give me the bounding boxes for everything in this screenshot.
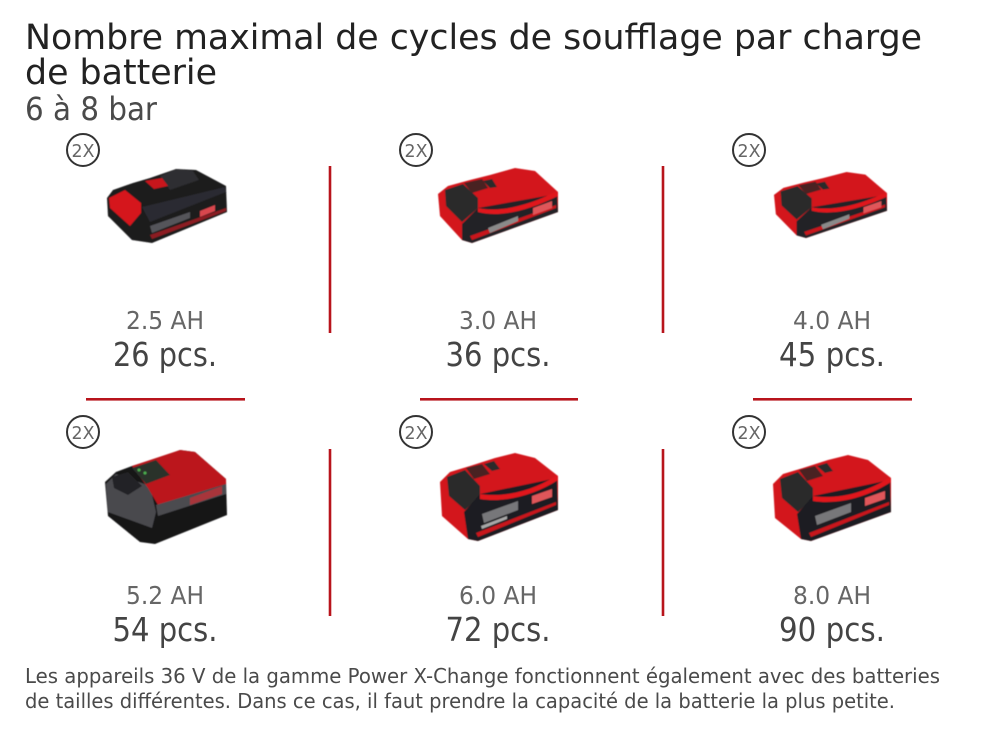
badge: 2X: 2X bbox=[738, 141, 760, 162]
card: 6.0 AH bbox=[400, 416, 558, 649]
title: Nombre maximal de cycles de soufflage par charge bbox=[25, 18, 922, 58]
badge: 2X bbox=[400, 416, 432, 448]
value: 26 pcs.: 26 pcs. bbox=[113, 335, 217, 374]
label: 8.0 AH: 8.0 AH bbox=[793, 581, 871, 610]
label: 2.5 AH: 2.5 AH bbox=[126, 306, 204, 335]
label: 5.2 AH: 5.2 AH bbox=[126, 581, 204, 610]
value: 36 pcs.: 36 pcs. bbox=[446, 335, 550, 374]
battery: 3.0 AH bbox=[438, 168, 558, 243]
value: 45 pcs.: 45 pcs. bbox=[779, 335, 885, 374]
battery: 5.2 AH bbox=[105, 450, 227, 544]
title bbox=[25, 18, 922, 93]
card: 2.5 AH bbox=[67, 134, 227, 374]
card: 8.0 AH bbox=[733, 416, 891, 649]
card: 4.0 AH bbox=[733, 134, 887, 374]
badge: 2X: 2X bbox=[404, 141, 428, 162]
footnote: de tailles différentes. Dans ce cas, il faut prendre la capacité de la batterie la plus petite. bbox=[25, 689, 895, 713]
battery: 4.0 AH bbox=[774, 172, 887, 238]
footnote bbox=[25, 664, 940, 713]
battery: 6.0 AH bbox=[440, 453, 558, 541]
footnote: Les appareils 36 V de la gamme Power X-Change fonctionnent également avec des batteries bbox=[25, 664, 940, 688]
badge: 2X bbox=[67, 416, 99, 448]
value: 54 pcs.: 54 pcs. bbox=[112, 610, 218, 649]
label: 6.0 AH: 6.0 AH bbox=[459, 581, 537, 610]
battery: 2.5 AH bbox=[107, 169, 227, 243]
badge: 2X: 2X bbox=[404, 423, 428, 444]
badge: 2X: 2X bbox=[72, 141, 94, 162]
card: 5.2 AH bbox=[67, 416, 227, 649]
label: 4.0 AH: 4.0 AH bbox=[793, 306, 871, 335]
subtitle: 6 à 8 bar bbox=[25, 90, 158, 128]
title: de batterie bbox=[25, 53, 217, 93]
battery: 8.0 AH bbox=[773, 455, 891, 541]
badge: 2X bbox=[733, 134, 765, 166]
label: 3.0 AH: 3.0 AH bbox=[459, 306, 537, 335]
badge: 2X: 2X bbox=[738, 423, 760, 444]
badge: 2X bbox=[400, 134, 432, 166]
badge: 2X bbox=[733, 416, 765, 448]
value: 90 pcs.: 90 pcs. bbox=[779, 610, 885, 649]
badge: 2X bbox=[67, 134, 99, 166]
card: 3.0 AH bbox=[400, 134, 558, 374]
badge: 2X: 2X bbox=[72, 423, 94, 444]
value: 72 pcs.: 72 pcs. bbox=[446, 610, 550, 649]
